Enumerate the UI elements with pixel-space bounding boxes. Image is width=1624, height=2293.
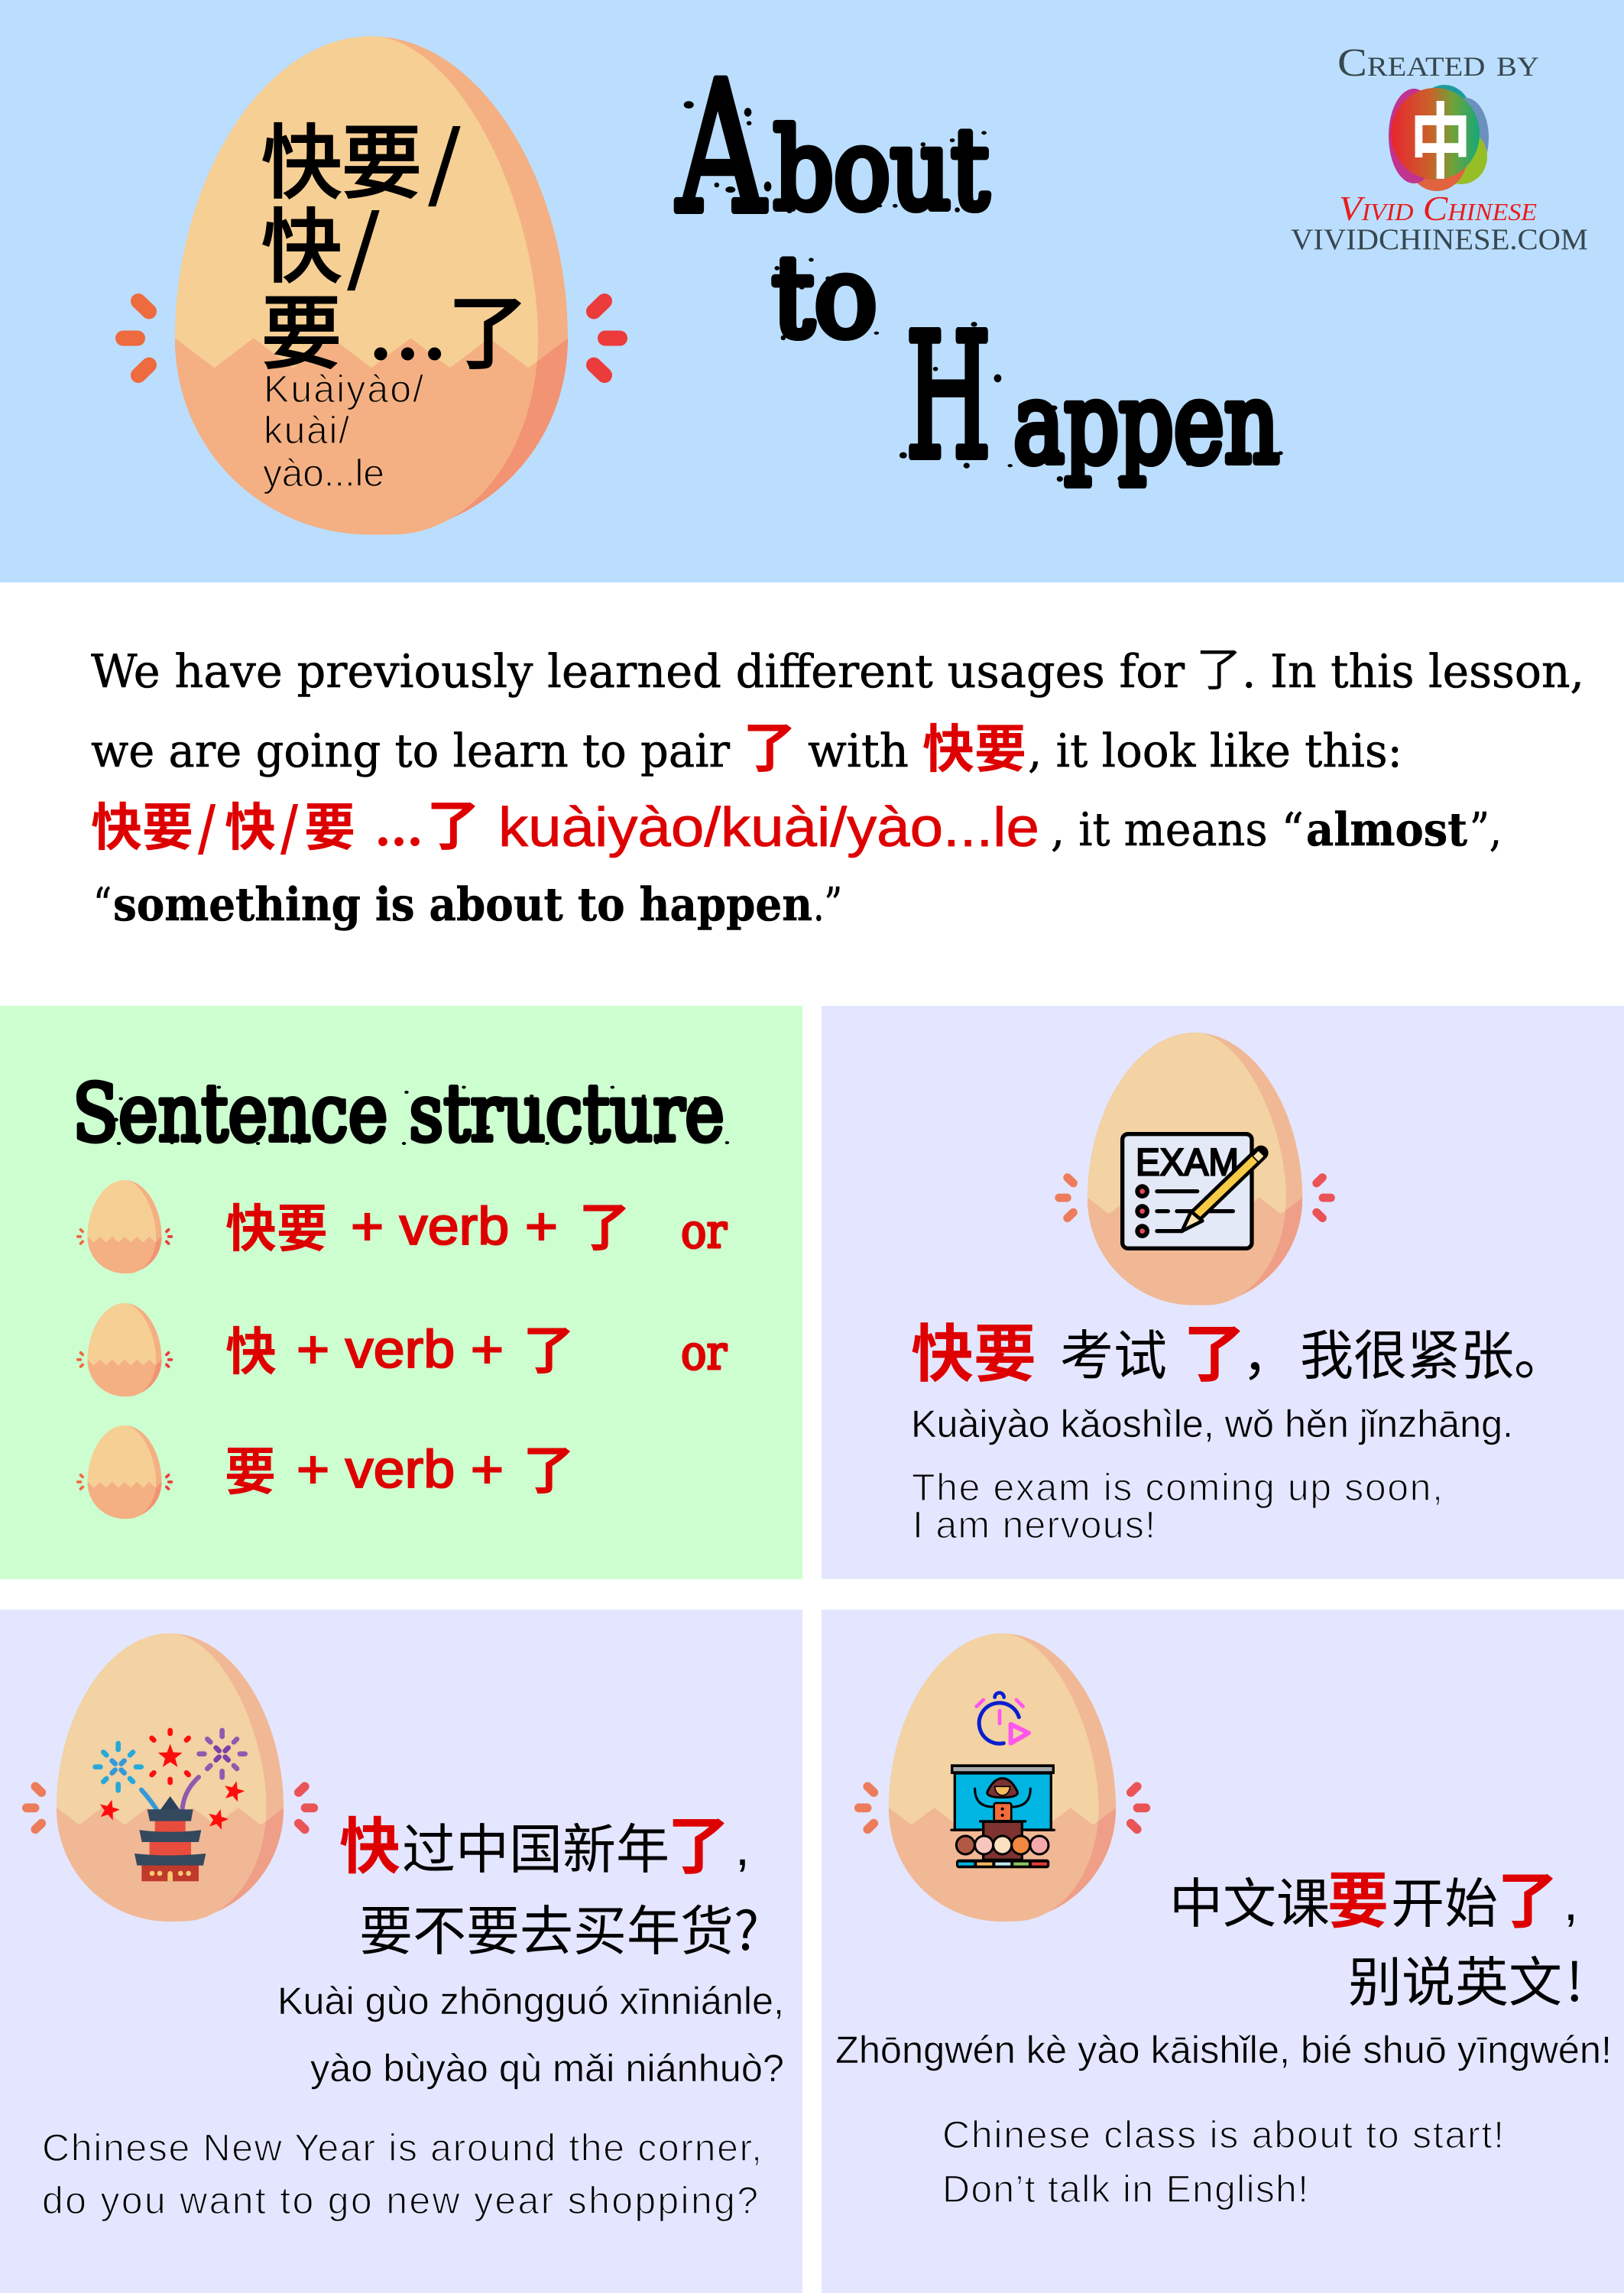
structure row 3: 要 — [225, 1431, 276, 1505]
heading: pattern in Chinese: / — [348, 183, 379, 299]
structure row 1 — [225, 1185, 630, 1262]
example sentence: Chinese: 过中国新年 — [402, 1807, 669, 1884]
text block: introduction: we are going to learn to pair — [91, 725, 730, 778]
example sentence: Chinese: ， — [1242, 1313, 1295, 1390]
title: About to Happen: H — [906, 297, 991, 498]
example sentence: Chinese: , — [1564, 1873, 1578, 1931]
example sentence: English: I am nervous! — [912, 1503, 1156, 1546]
example sentence: Chinese — [1169, 1852, 1583, 2017]
structure row 3 — [225, 1429, 575, 1505]
title: About to Happen: A — [676, 44, 767, 253]
text block: introduction — [91, 633, 1584, 932]
text block: introduction: ... — [376, 796, 424, 858]
example sentence: pinyin: Zhōngwén kè yào kāishǐle, bié shuō yīngwén! — [835, 2029, 1612, 2071]
example sentence: pinyin: Kuàiyào kǎoshìle, wǒ hěn jǐnzhāng. — [911, 1403, 1513, 1445]
example sentence: Chinese: 我很紧张。 — [1300, 1313, 1567, 1390]
heading: sentence structure: Sentence structure — [73, 1068, 724, 1159]
text block: introduction: kuàiyào/kuài/yào...le — [498, 797, 1039, 858]
text block: introduction: .” — [813, 878, 842, 932]
structure row 2: 快 — [225, 1311, 277, 1385]
structure row 3: + verb + — [297, 1439, 504, 1499]
example sentence: Chinese: 中文课 — [1169, 1861, 1330, 1938]
text block: introduction: “ — [93, 878, 112, 932]
example sentence: English: do you want to go new year shopping? — [42, 2179, 758, 2222]
icon: egg with exam sheet: EXAM — [1136, 1140, 1239, 1183]
title: About to Happen — [676, 44, 1283, 498]
example sentence: Chinese: 开始 — [1391, 1861, 1498, 1938]
text block: introduction: , it look like this: — [1028, 725, 1402, 778]
structure row 2: + verb + — [297, 1319, 504, 1379]
credit: created by: Created by — [1337, 41, 1539, 85]
structure row 1: 快要 — [225, 1188, 328, 1262]
text block: introduction: something is about to happen — [113, 878, 812, 932]
text block: introduction: 了 — [743, 705, 796, 783]
example sentence: Chinese: 快 — [339, 1798, 400, 1886]
logo: Vivid Chinese: 中 — [1410, 76, 1471, 196]
text block: introduction: 了 — [426, 783, 480, 861]
panel: exam example — [822, 1006, 1624, 1579]
pinyin in egg: yào...le — [263, 452, 384, 495]
pinyin in egg: Kuàiyào/ — [264, 368, 423, 410]
text block: introduction: We have previously learned different usages for — [91, 645, 1185, 699]
icon: egg with fireworks and pagoda — [27, 1633, 313, 1925]
panel: header — [0, 0, 1624, 582]
heading: pattern in Chinese: 了 — [448, 269, 528, 385]
structure row 3: 了 — [523, 1429, 575, 1504]
icon: large egg — [123, 37, 620, 541]
pinyin in egg: kuài/ — [264, 409, 349, 452]
example sentence: English: Chinese class is about to start! — [942, 2113, 1504, 2156]
text block: introduction: , it means “ — [1051, 803, 1304, 857]
or label 1: or — [681, 1203, 727, 1259]
heading: pattern in Chinese: 快要 — [261, 99, 422, 215]
logo: Vivid Chinese — [1389, 76, 1489, 196]
text block: introduction: with — [808, 725, 909, 778]
example sentence: English: The exam is coming up soon, — [912, 1466, 1443, 1509]
heading: pattern in Chinese: 要 — [261, 269, 342, 385]
website: VIVIDCHINESE.COM — [1291, 223, 1588, 256]
icon: small egg 2 — [78, 1303, 171, 1397]
icon: small egg 1 — [78, 1180, 171, 1274]
icon: egg with stopwatch and classroom — [859, 1633, 1146, 1925]
example sentence: Chinese: 了 — [1183, 1303, 1246, 1394]
icon: egg with exam sheet — [1059, 1033, 1331, 1309]
panel: Chinese class example — [822, 1610, 1624, 2293]
heading: pattern in Chinese: / — [429, 99, 460, 215]
panel: sentence structure — [0, 1006, 802, 1579]
structure row 2: 了 — [523, 1309, 575, 1384]
example sentence: Chinese: 快要 — [911, 1303, 1036, 1394]
example sentence: English: Chinese New Year is around the corner, — [42, 2126, 762, 2169]
icon: small egg 3 — [78, 1425, 171, 1519]
structure row 1: + verb + — [351, 1196, 558, 1256]
structure row 1: 了 — [579, 1185, 630, 1261]
structure row 2 — [225, 1309, 575, 1385]
example sentence: Chinese: 了 — [667, 1795, 730, 1886]
text block: introduction: 快要/快/要 — [91, 786, 355, 861]
text block: introduction: 了 — [1196, 633, 1242, 699]
title: About to Happen: to — [772, 233, 877, 362]
example sentence: pinyin: Kuài gùo zhōngguó xīnniánle, — [277, 1980, 784, 2022]
logo wordmark: Vivid Chinese — [1339, 189, 1537, 228]
title: About to Happen: bout — [773, 105, 989, 235]
example sentence: pinyin: yào bùyào qù mǎi niánhuò? — [310, 2047, 784, 2090]
example sentence: Chinese — [339, 1795, 759, 1966]
or label 2: or — [681, 1325, 727, 1380]
panel: new year example — [0, 1610, 802, 2293]
title: About to Happen: appen — [1013, 359, 1279, 488]
example sentence: Chinese: 要 — [1327, 1852, 1389, 1941]
text block: introduction: ”, — [1470, 803, 1502, 857]
example sentence: Chinese — [911, 1303, 1567, 1394]
example sentence: Chinese: 要不要去买年货? — [359, 1889, 759, 1966]
text block: introduction: 快要 — [922, 707, 1026, 783]
example sentence: Chinese: 了 — [1497, 1852, 1558, 1941]
text block: introduction: . In this lesson, — [1242, 645, 1584, 699]
example sentence: English: Don’t talk in English! — [942, 2168, 1308, 2210]
heading: pattern in Chinese: 快 — [261, 183, 342, 299]
example sentence: Chinese: , — [735, 1818, 750, 1876]
ellipsis: ... — [371, 287, 452, 377]
example sentence: Chinese: 考试 — [1060, 1313, 1167, 1390]
example sentence: Chinese: 别说英文! — [1348, 1940, 1583, 2017]
text block: introduction: almost — [1306, 803, 1467, 857]
